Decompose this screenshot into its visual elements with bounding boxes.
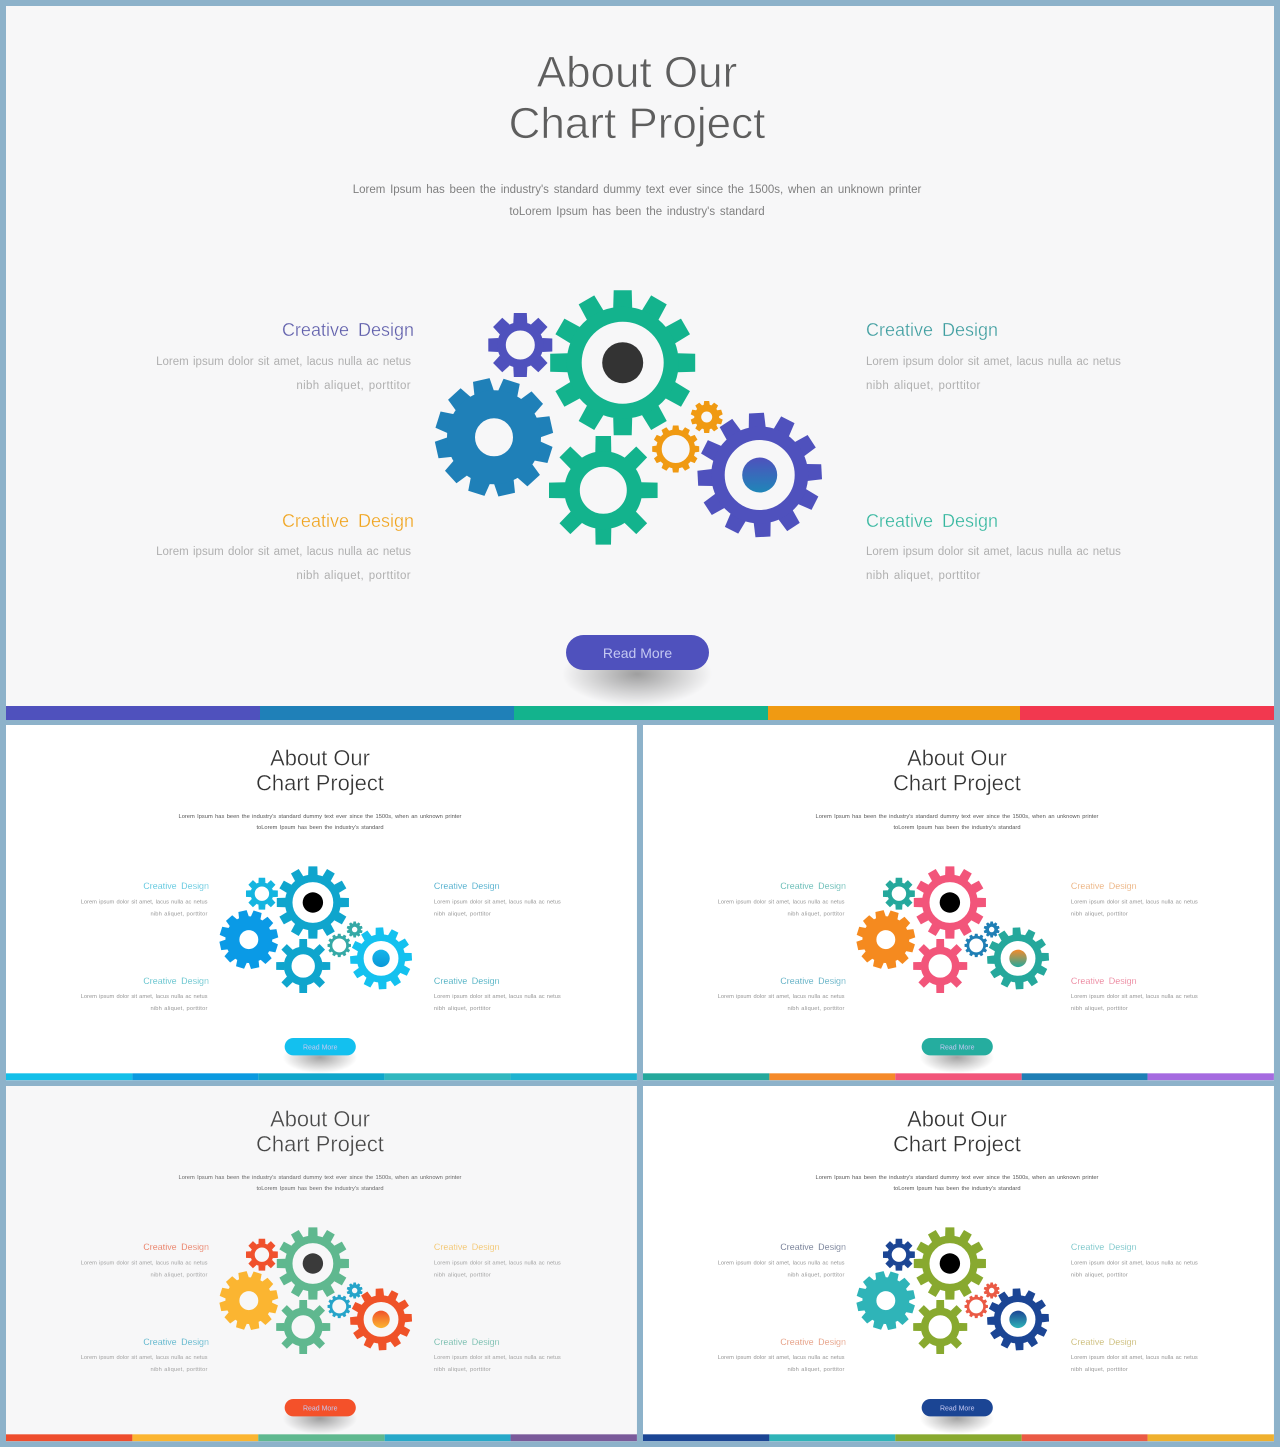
icon: bottom gear	[549, 436, 658, 545]
text block: top left	[718, 881, 846, 917]
color bar	[6, 1073, 637, 1080]
heading: Creative Design	[434, 976, 500, 986]
intro text: Lorem Ipsum has been the industry's standard dummy text ever since the 1500s, when an unknown printer	[353, 184, 921, 196]
title	[509, 48, 765, 148]
heading: Creative Design	[434, 1242, 500, 1252]
icon: red gear	[965, 1295, 988, 1318]
body text: Lorem ipsum dolor sit amet, lacus nulla ac netus	[81, 899, 208, 905]
icon: right gear	[349, 1287, 413, 1352]
body text: nibh aliquet, porttitor	[866, 380, 981, 392]
text block: top left	[156, 320, 414, 392]
icon: small gear	[883, 1239, 915, 1271]
body text: Lorem ipsum dolor sit amet, lacus nulla ac netus	[718, 1354, 845, 1360]
body text	[156, 356, 411, 392]
intro text: toLorem Ipsum has been the industry's standard	[893, 825, 1021, 830]
button shadow	[283, 1402, 357, 1434]
body text: nibh aliquet, porttitor	[434, 1272, 491, 1278]
body text: nibh aliquet, porttitor	[787, 911, 845, 917]
button	[566, 635, 709, 670]
body text: Lorem ipsum dolor sit amet, lacus nulla ac netus	[156, 356, 411, 368]
button shadow	[920, 1041, 994, 1073]
heading: Creative Design	[1071, 881, 1137, 891]
text block: bottom right	[1071, 1337, 1222, 1375]
body text: nibh aliquet, porttitor	[434, 1005, 491, 1011]
intro text	[178, 814, 462, 830]
title: About Our	[907, 746, 1007, 770]
body text	[1071, 1257, 1222, 1281]
body text	[1071, 899, 1198, 917]
heading: Creative Design	[780, 1242, 846, 1252]
body text	[695, 1351, 846, 1375]
button	[922, 1038, 993, 1055]
intro text: Lorem Ipsum has been the industry's standard dummy text ever since the 1500s, when an unknown printer	[816, 1175, 1098, 1181]
title: Chart Project	[893, 1132, 1021, 1156]
text block: bottom left	[58, 1337, 209, 1375]
panel: navy and olive variant	[643, 1086, 1274, 1441]
body text	[718, 993, 845, 1011]
button	[922, 1399, 993, 1416]
text block: bottom right	[1071, 976, 1198, 1011]
body text: Lorem ipsum dolor sit amet, lacus nulla ac netus	[718, 1260, 845, 1266]
title: Chart Project	[893, 771, 1021, 795]
heading: Creative Design	[780, 1337, 846, 1347]
text block: bottom left	[81, 976, 209, 1011]
text block: top left	[81, 881, 209, 917]
text block: bottom right	[866, 511, 1121, 582]
color bar	[6, 706, 1274, 720]
body text	[1071, 1351, 1222, 1375]
body text: Lorem ipsum dolor sit amet, lacus nulla ac netus	[718, 993, 845, 999]
button shadow	[562, 642, 712, 706]
text block: bottom right	[434, 1337, 585, 1375]
body text	[434, 1257, 585, 1281]
icon: bottom gear	[913, 1300, 967, 1354]
intro text	[816, 814, 1098, 830]
title	[808, 1106, 1106, 1157]
title: About Our	[537, 48, 737, 96]
title: Chart Project	[509, 98, 765, 148]
icon: bottom gear	[276, 939, 330, 993]
intro text: Lorem Ipsum has been the industry's standard dummy text ever since the 1500s, when an unknown printer	[816, 814, 1098, 820]
heading: Creative Design	[143, 1337, 209, 1347]
body text: nibh aliquet, porttitor	[1071, 1005, 1128, 1011]
heading: Creative Design	[282, 320, 414, 340]
body text: Lorem ipsum dolor sit amet, lacus nulla ac netus	[434, 1354, 561, 1360]
text block: top right	[866, 320, 1121, 392]
body text	[866, 356, 1121, 392]
icon: large top gear	[914, 1227, 986, 1300]
body text	[695, 1257, 846, 1281]
heading: Creative Design	[1071, 1337, 1137, 1347]
heading: Creative Design	[143, 976, 209, 986]
body text	[434, 1351, 585, 1375]
gear cluster	[6, 1086, 637, 1441]
icon: left gear	[212, 1264, 285, 1337]
color bar	[643, 1434, 1274, 1441]
intro text: toLorem Ipsum has been the industry's standard	[256, 1186, 384, 1191]
heading: Creative Design	[1071, 1242, 1137, 1252]
body text: Lorem ipsum dolor sit amet, lacus nulla ac netus	[1071, 993, 1198, 999]
icon: small purple gear	[488, 313, 552, 377]
icon: bottom gear	[276, 1300, 330, 1354]
body text: nibh aliquet, porttitor	[150, 911, 208, 917]
text block: bottom right	[434, 976, 561, 1011]
button: Read More	[603, 645, 672, 661]
body text: Lorem ipsum dolor sit amet, lacus nulla ac netus	[81, 1354, 208, 1360]
intro text: Lorem Ipsum has been the industry's standard dummy text ever since the 1500s, when an unknown printer	[179, 814, 461, 820]
body text: Lorem ipsum dolor sit amet, lacus nulla ac netus	[866, 356, 1121, 368]
button shadow	[283, 1041, 357, 1073]
icon: small gear	[246, 878, 278, 910]
intro text: toLorem Ipsum has been the industry's standard	[509, 206, 765, 218]
icon: blue gear	[420, 364, 568, 511]
body text	[434, 899, 561, 917]
heading: Creative Design	[866, 320, 998, 340]
body text: Lorem ipsum dolor sit amet, lacus nulla ac netus	[434, 993, 561, 999]
body text: Lorem ipsum dolor sit amet, lacus nulla ac netus	[434, 899, 561, 905]
title: About Our	[270, 1107, 370, 1131]
button shadow	[920, 1402, 994, 1434]
icon: right gear	[986, 926, 1050, 991]
body text: Lorem ipsum dolor sit amet, lacus nulla ac netus	[81, 1260, 208, 1266]
body text: Lorem ipsum dolor sit amet, lacus nulla ac netus	[1071, 1260, 1198, 1266]
body text: nibh aliquet, porttitor	[787, 1005, 845, 1011]
title: About Our	[907, 1107, 1007, 1131]
body text: nibh aliquet, porttitor	[150, 1005, 208, 1011]
gear cluster	[643, 1086, 1274, 1441]
panel: coral and teal variant	[643, 725, 1274, 1080]
body text	[156, 546, 411, 582]
body text: Lorem ipsum dolor sit amet, lacus nulla ac netus	[1071, 1354, 1198, 1360]
icon: bottom gear	[913, 939, 967, 993]
body text: nibh aliquet, porttitor	[434, 1366, 491, 1372]
body text	[81, 1260, 208, 1278]
icon: large top gear	[277, 1227, 349, 1300]
icon: large top gear	[550, 290, 695, 435]
title: Chart Project	[256, 771, 384, 795]
button: Read More	[940, 1043, 974, 1051]
color bar	[643, 1073, 1274, 1080]
body text: nibh aliquet, porttitor	[787, 1272, 845, 1278]
title: About Our	[270, 746, 370, 770]
icon: teal gear	[328, 934, 351, 957]
body text: Lorem ipsum dolor sit amet, lacus nulla ac netus	[434, 1260, 561, 1266]
text block: top right	[1071, 881, 1198, 917]
body text: Lorem ipsum dolor sit amet, lacus nulla ac netus	[866, 546, 1121, 558]
icon: tiny red gear	[984, 1283, 1000, 1298]
intro text	[353, 184, 922, 218]
intro text: Lorem Ipsum has been the industry's standard dummy text ever since the 1500s, when an unknown printer	[179, 1175, 461, 1181]
icon: large top gear	[914, 866, 986, 939]
icon: left gear	[849, 903, 922, 976]
icon: small gear	[883, 878, 915, 910]
text block: bottom left	[156, 511, 414, 582]
body text: nibh aliquet, porttitor	[434, 911, 491, 917]
button	[285, 1399, 356, 1416]
heading: Creative Design	[434, 881, 500, 891]
icon: orange gear	[652, 426, 699, 472]
icon: blue gear	[328, 1295, 351, 1318]
icon: left gear	[849, 1264, 922, 1337]
title	[256, 746, 384, 795]
intro text: toLorem Ipsum has been the industry's standard	[256, 825, 384, 830]
intro text	[758, 1172, 1156, 1194]
body text	[81, 993, 208, 1011]
intro text: toLorem Ipsum has been the industry's standard	[893, 1186, 1021, 1191]
body text: Lorem ipsum dolor sit amet, lacus nulla ac netus	[718, 899, 845, 905]
gear cluster	[219, 866, 412, 993]
icon: large top gear	[277, 866, 349, 939]
text block: top right	[434, 881, 561, 917]
button: Read More	[940, 1404, 974, 1412]
color bar	[6, 1434, 637, 1441]
body text	[434, 993, 561, 1011]
icon: tiny teal gear	[347, 922, 363, 937]
body text: nibh aliquet, porttitor	[787, 1366, 845, 1372]
body text	[718, 899, 845, 917]
body text	[81, 899, 208, 917]
body text: nibh aliquet, porttitor	[150, 1366, 208, 1372]
heading: Creative Design	[282, 511, 414, 531]
body text: nibh aliquet, porttitor	[1071, 1366, 1128, 1372]
icon: tiny orange gear	[690, 401, 723, 433]
panel: main slide	[6, 6, 1274, 720]
icon: right gear	[349, 926, 413, 991]
text block: bottom left	[695, 1337, 846, 1375]
text block: top right	[1071, 1242, 1222, 1281]
heading: Creative Design	[780, 881, 846, 891]
text block: bottom left	[718, 976, 846, 1011]
body text: Lorem ipsum dolor sit amet, lacus nulla ac netus	[81, 993, 208, 999]
title	[256, 1107, 384, 1156]
heading: Creative Design	[1071, 976, 1137, 986]
icon: small gear	[246, 1239, 278, 1271]
body text: nibh aliquet, porttitor	[296, 570, 411, 582]
body text	[58, 1351, 209, 1375]
title: Chart Project	[256, 1132, 384, 1156]
body text: nibh aliquet, porttitor	[866, 570, 981, 582]
text block: top left	[81, 1242, 209, 1278]
icon: right gear	[695, 410, 825, 540]
button: Read More	[303, 1043, 337, 1051]
button: Read More	[303, 1404, 337, 1412]
icon: tiny blue gear	[347, 1283, 363, 1298]
heading: Creative Design	[434, 1337, 500, 1347]
gear cluster	[856, 866, 1050, 993]
icon: right gear	[986, 1287, 1050, 1352]
body text: nibh aliquet, porttitor	[1071, 911, 1128, 917]
body text: nibh aliquet, porttitor	[296, 380, 411, 392]
panel: blue variant	[6, 725, 637, 1080]
body text	[1071, 993, 1198, 1011]
heading: Creative Design	[143, 881, 209, 891]
body text: Lorem ipsum dolor sit amet, lacus nulla ac netus	[156, 546, 411, 558]
text block: top left	[695, 1242, 846, 1281]
panel: warm variant	[6, 1086, 637, 1441]
gear cluster	[434, 290, 822, 545]
body text	[866, 546, 1121, 582]
icon: blue gear	[965, 934, 988, 957]
button	[285, 1038, 356, 1055]
body text: Lorem ipsum dolor sit amet, lacus nulla ac netus	[1071, 899, 1198, 905]
icon: tiny blue gear	[984, 922, 1000, 937]
heading: Creative Design	[780, 976, 846, 986]
title	[893, 746, 1021, 795]
body text: nibh aliquet, porttitor	[1071, 1272, 1128, 1278]
text block: top right	[434, 1242, 585, 1281]
intro text	[178, 1175, 462, 1191]
heading: Creative Design	[866, 511, 998, 531]
body text: nibh aliquet, porttitor	[150, 1272, 208, 1278]
icon: left gear	[212, 903, 285, 976]
heading: Creative Design	[143, 1242, 209, 1252]
